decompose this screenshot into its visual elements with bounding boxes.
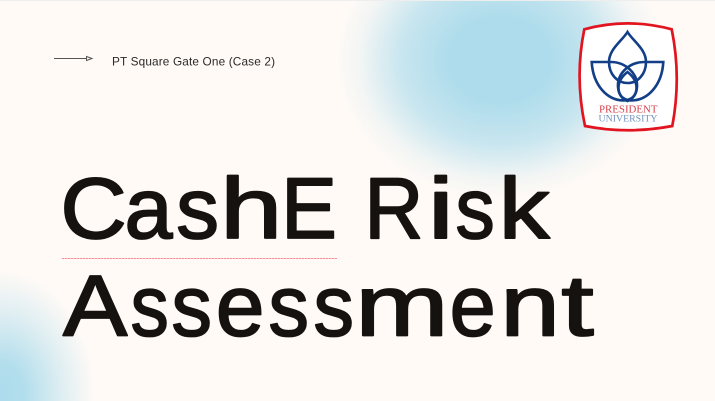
arrow	[54, 56, 92, 60]
logo wordmark: PRESIDENT	[599, 105, 658, 116]
top edge line	[0, 0, 715, 1]
title: i	[428, 161, 454, 257]
title: a	[124, 161, 173, 257]
title: s	[268, 258, 309, 354]
logo badge	[580, 23, 677, 130]
title: s	[456, 161, 495, 257]
title: n	[500, 258, 560, 354]
title: A	[63, 258, 128, 354]
title: s	[176, 161, 219, 257]
title: E	[281, 161, 337, 257]
title: e	[216, 258, 264, 354]
spellcheck underline	[62, 258, 337, 260]
title: e	[450, 258, 496, 354]
lotus icon	[592, 32, 663, 101]
title: k	[499, 161, 551, 257]
title: s	[314, 258, 354, 354]
title: s	[131, 258, 169, 354]
title: t	[561, 258, 594, 354]
title: m	[355, 258, 448, 354]
title: C	[60, 161, 127, 257]
title: s	[172, 258, 212, 354]
title: h	[220, 161, 282, 257]
title: R	[364, 161, 423, 257]
logo: President University: UNIVERSITY	[598, 114, 658, 124]
title	[60, 161, 594, 354]
subtitle: PT Square Gate One (Case 2)	[112, 54, 275, 68]
logo: President University	[580, 23, 677, 130]
